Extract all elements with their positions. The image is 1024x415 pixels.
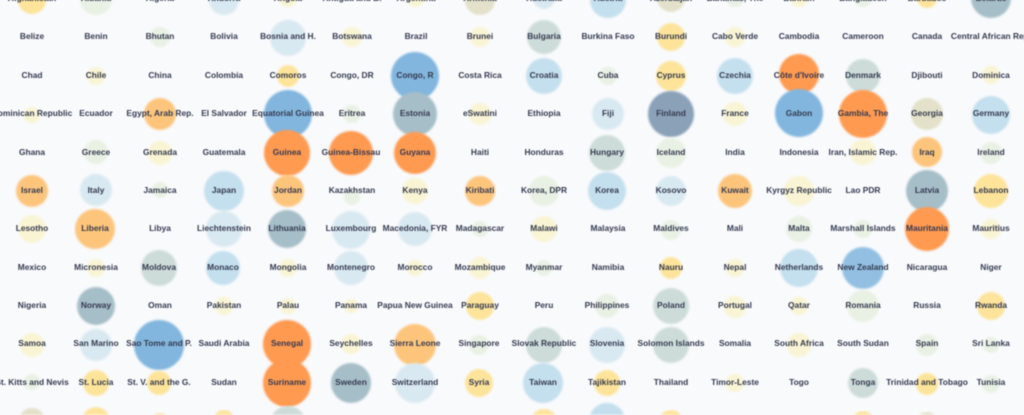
country: Kuwait: [718, 174, 752, 208]
country: Peru: Peru: [535, 300, 553, 310]
country: Jordan: Jordan: [274, 185, 302, 195]
country: Afghanistan: [8, 0, 56, 14]
country: Azerbaijan: [650, 0, 692, 12]
country: Czechia: [717, 58, 753, 94]
country: Thailand: Thailand: [654, 377, 688, 387]
country: Solomon Islands: [637, 327, 705, 363]
country: Chad: Chad: [22, 70, 42, 80]
row: Belize to Central African Rep.: [20, 20, 1024, 56]
country: Togo: Togo: [789, 377, 809, 387]
country: Croatia: Croatia: [530, 70, 559, 80]
country: Hungary: Hungary: [590, 147, 624, 157]
country: Kosovo: Kosovo: [656, 185, 686, 195]
country: Bosnia and H.: [260, 20, 316, 56]
country: Comoros: [270, 65, 307, 87]
country: Madagascar: [456, 221, 505, 237]
country: Cabo Verde: [712, 27, 758, 47]
country: eSwatini: [463, 103, 497, 125]
country: Netherlands: [775, 249, 824, 287]
row: bubbles cut off at the bottom edge: [20, 403, 934, 415]
country: Morocco: Morocco: [398, 262, 432, 272]
country: Palau: [277, 298, 299, 314]
country: Nepal: [724, 259, 746, 277]
country: Mali: Mali: [727, 223, 743, 233]
country: Liechtenstein: [197, 211, 251, 247]
country: China: China: [148, 70, 172, 80]
country: Sweden: Sweden: [335, 377, 367, 387]
country: Guinea: Guinea: [273, 147, 302, 157]
country: Sao Tome and P.: [126, 320, 192, 370]
country: Jordan: [272, 175, 304, 207]
country: Norway: Norway: [81, 300, 111, 310]
country: Timor-Leste: [711, 374, 759, 392]
country: Maldives: [653, 220, 689, 240]
country: San Marino: San Marino: [73, 338, 119, 348]
country: Belarus: [971, 0, 1011, 18]
country: Czechia: Czechia: [719, 70, 751, 80]
country: Georgia: Georgia: [911, 108, 943, 118]
country: Jamaica: Jamaica: [143, 185, 177, 195]
country: Sudan: Sudan: [211, 377, 237, 387]
country: Liechtenstein: Liechtenstein: [197, 223, 251, 233]
country: Romania: [845, 290, 881, 322]
country: Iceland: Iceland: [657, 147, 685, 157]
country: Israel: [16, 175, 48, 207]
country: Djibouti: Djibouti: [911, 70, 943, 80]
country: Liberia: [75, 209, 115, 249]
country: Singapore: [459, 335, 500, 355]
country: Oman: Oman: [148, 300, 172, 310]
country: Gabon: Gabon: [786, 108, 812, 118]
country: Morocco: [398, 260, 432, 276]
country: Chile: Chile: [86, 70, 107, 80]
country: Sao Tome and P.: Sao Tome and P.: [126, 338, 192, 348]
country: Bosnia and H.: Bosnia and H.: [260, 31, 316, 41]
country: Paraguay: [461, 292, 499, 320]
country: Iran, Islamic Rep.: Iran, Islamic Rep.: [829, 147, 897, 157]
country: Lebanon: [974, 174, 1008, 208]
row: Dominican Republic to Germany: [0, 89, 1010, 138]
country: Macedonia, FYR: [383, 212, 447, 246]
country: Pakistan: Pakistan: [207, 300, 241, 310]
country: Japan: [204, 171, 244, 211]
country: Cuba: [598, 67, 619, 85]
country: Spain: Spain: [916, 338, 938, 348]
country: Seychelles: [329, 334, 373, 354]
country: Iraq: [912, 137, 942, 167]
country: Estonia: Estonia: [400, 108, 430, 118]
country: Marshall Islands: Marshall Islands: [830, 223, 896, 233]
country: Gabon: [775, 89, 823, 137]
country: St. V. and the G.: [127, 371, 191, 395]
country: Malawi: [530, 216, 558, 242]
country: Cuba: Cuba: [598, 70, 619, 80]
country: Mauritania: Mauritania: [906, 223, 948, 233]
country: Latvia: [906, 170, 948, 212]
country: Tonga: Tonga: [851, 377, 876, 387]
country: Philippines: Philippines: [585, 300, 630, 310]
country: Benin: Benin: [84, 31, 108, 41]
country: Guinea-Bissau: Guinea-Bissau: [322, 147, 380, 157]
country: Ghana: Ghana: [19, 147, 45, 157]
country: Macedonia, FYR: Macedonia, FYR: [383, 223, 447, 233]
country: Brunei: Brunei: [467, 31, 493, 41]
country: Côte d'Ivoire: Côte d'Ivoire: [774, 70, 825, 80]
country: Guatemala: Guatemala: [203, 147, 246, 157]
country: Syria: [465, 369, 493, 397]
country: Gambia, The: [838, 90, 888, 138]
country: Bulgaria: Bulgaria: [527, 31, 561, 41]
country: Congo, R: Congo, R: [396, 70, 434, 80]
country: Nepal: Nepal: [724, 262, 746, 272]
country: Slovak Republic: [512, 327, 577, 363]
country: Honduras: Honduras: [524, 147, 564, 157]
country: Haiti: Haiti: [471, 147, 489, 157]
row: Chad to Dominica: [22, 52, 1010, 100]
country: Mozambique: Mozambique: [455, 262, 506, 272]
country: Switzerland: [392, 363, 438, 403]
country: Bangladesh: [839, 0, 887, 7]
country: Kyrgyz Republic: [766, 176, 832, 206]
country: Bahamas, The: [707, 0, 764, 7]
country: Pakistan: [207, 297, 241, 315]
country: Poland: [653, 288, 689, 324]
country: Tonga: [848, 368, 878, 398]
country: St. Lucia: St. Lucia: [79, 377, 114, 387]
country: Syria: Syria: [469, 377, 490, 387]
country: Luxembourg: [326, 211, 376, 249]
country: Congo, DR: Congo, DR: [330, 70, 374, 80]
country: Moldova: Moldova: [142, 262, 176, 272]
country: Samoa: [18, 333, 46, 357]
country: Monaco: Monaco: [207, 262, 239, 272]
country: Rwanda: Rwanda: [975, 300, 1007, 310]
country: Kyrgyz Republic: Kyrgyz Republic: [766, 185, 832, 195]
country: Kiribati: [465, 176, 495, 206]
row: Mexico to Niger: [18, 247, 1002, 289]
country: Poland: Poland: [657, 300, 685, 310]
country: Bhutan: [146, 27, 174, 47]
country: Lithuania: Lithuania: [268, 223, 306, 233]
country: San Marino: [73, 329, 119, 361]
country: Botswana: [332, 27, 372, 47]
country: Mongolia: [270, 259, 307, 277]
country: Montenegro: Montenegro: [327, 262, 375, 272]
country: Iraq: Iraq: [919, 147, 935, 157]
country: Palau: Palau: [277, 300, 299, 310]
country: Fiji: Fiji: [602, 108, 614, 118]
country: Ethiopia: Ethiopia: [527, 108, 561, 118]
country: Fiji: [592, 98, 624, 130]
country: Botswana: Botswana: [332, 31, 372, 41]
row: Ghana to Ireland: [19, 130, 1005, 176]
country: Sierra Leone: Sierra Leone: [390, 338, 441, 348]
country: Portugal: [718, 296, 752, 318]
country: Maldives: Maldives: [653, 223, 689, 233]
country: Micronesia: Micronesia: [74, 262, 118, 272]
country: Malta: Malta: [788, 223, 810, 233]
country: Cyprus: [656, 61, 686, 91]
country: Madagascar: Madagascar: [456, 223, 505, 233]
country: Tajikistan: Tajikistan: [588, 377, 626, 387]
country: Guinea-Bissau: [322, 131, 380, 175]
country: Cameroon: Cameroon: [842, 31, 884, 41]
country: India: India: [725, 147, 745, 157]
country: South Sudan: South Sudan: [837, 338, 889, 348]
country: Dominican Republic: [0, 107, 73, 123]
country: Burundi: Burundi: [655, 31, 687, 41]
country: Eritrea: [339, 105, 366, 123]
country: Libya: Libya: [149, 223, 171, 233]
country: Lebanon: Lebanon: [974, 185, 1008, 195]
country: Moldova: [141, 250, 177, 286]
country: Nicaragua: Nicaragua: [907, 262, 948, 272]
country: Sri Lanka: [972, 337, 1010, 353]
country: Nigeria: Nigeria: [18, 300, 47, 310]
country: Tunisia: Tunisia: [977, 377, 1006, 387]
country: Japan: Japan: [212, 185, 236, 195]
country: Angola: [274, 0, 303, 7]
country: Iran, Islamic Rep.: [829, 139, 897, 165]
country: Brunei: [467, 27, 493, 47]
country: Armenia: [463, 0, 497, 15]
country: Paraguay: Paraguay: [461, 300, 499, 310]
country: Tunisia: [977, 375, 1006, 393]
country: Hungary: [589, 135, 625, 171]
country: Dominica: [972, 66, 1010, 84]
country: Kuwait: Kuwait: [721, 185, 749, 195]
country: France: [721, 102, 749, 126]
country: Korea, DPR: Korea, DPR: [521, 185, 567, 195]
country: Equatorial Guinea: [252, 90, 324, 138]
country: Indonesia: Indonesia: [779, 147, 819, 157]
country: Portugal: Portugal: [718, 300, 752, 310]
country: Denmark: Denmark: [845, 70, 881, 80]
country: Singapore: Singapore: [459, 338, 500, 348]
country: Suriname: Suriname: [268, 377, 306, 387]
row: Samoa to Sri Lanka: [18, 320, 1010, 370]
country: Kenya: [402, 178, 428, 204]
country: Switzerland: Switzerland: [392, 377, 438, 387]
country: Finland: [648, 91, 694, 137]
country: Jamaica: [143, 182, 177, 198]
country: Korea: Korea: [595, 185, 619, 195]
country: Mauritania: [905, 207, 949, 251]
country: Gambia, The: Gambia, The: [838, 108, 888, 118]
country: Greece: Greece: [82, 147, 111, 157]
country: St. Kitts and Nevis: [0, 374, 69, 390]
country: Lao PDR: Lao PDR: [846, 185, 880, 195]
country: Rwanda: [975, 292, 1007, 320]
country: Croatia: [526, 58, 562, 94]
country: Germany: Germany: [973, 108, 1009, 118]
country: Argentina: [396, 0, 436, 7]
country: Kazakhstan: Kazakhstan: [329, 185, 375, 195]
country: Montenegro: [327, 251, 375, 285]
country: Tajikistan: [588, 370, 626, 396]
country: Mongolia: Mongolia: [270, 262, 307, 272]
country: Marshall Islands: [830, 220, 896, 238]
country: Trinidad and Tobago: Trinidad and Tobago: [886, 377, 968, 387]
country: Italy: Italy: [88, 185, 105, 195]
country: Romania: Romania: [845, 300, 881, 310]
country: Israel: Israel: [21, 185, 43, 195]
country: Guyana: [394, 132, 436, 174]
country: El Salvador: El Salvador: [201, 108, 248, 118]
country: Myanmar: [526, 260, 563, 276]
country: Burkina Faso: Burkina Faso: [581, 31, 635, 41]
country: Papua New Guinea: Papua New Guinea: [377, 300, 453, 310]
country: Lesotho: Lesotho: [16, 223, 48, 233]
country: Equatorial Guinea: Equatorial Guinea: [252, 108, 324, 118]
country: Mozambique: [455, 257, 506, 279]
country: Netherlands: Netherlands: [775, 262, 824, 272]
country: Suriname: [263, 359, 311, 407]
country: Taiwan: [523, 363, 563, 403]
country: Germany: [972, 96, 1010, 134]
country: Cyprus: Cyprus: [657, 70, 686, 80]
country: Solomon Islands: Solomon Islands: [637, 338, 705, 348]
country: Samoa: Samoa: [18, 338, 46, 348]
country: Latvia: Latvia: [915, 185, 939, 195]
country: Timor-Leste: Timor-Leste: [711, 377, 759, 387]
country: Estonia: [393, 92, 437, 136]
country: Slovak Republic: Slovak Republic: [512, 338, 577, 348]
country: Somalia: Somalia: [719, 338, 751, 348]
country: Senegal: [263, 320, 311, 368]
row: Lesotho to Mauritius: [16, 207, 1010, 251]
country: Micronesia: [74, 259, 118, 277]
country: Belize: Belize: [20, 31, 44, 41]
country: Mexico: Mexico: [18, 262, 46, 272]
country: Saudi Arabia: Saudi Arabia: [199, 338, 250, 348]
country: France: France: [721, 108, 749, 118]
country: South Africa: South Africa: [774, 338, 824, 348]
country: Kosovo: [656, 176, 686, 206]
country: Comoros: Comoros: [270, 70, 307, 80]
country: Liberia: Liberia: [81, 223, 109, 233]
country: Bahrain: [783, 0, 815, 7]
country: Denmark: [845, 59, 881, 93]
country: Albania: [80, 0, 112, 15]
country: Ireland: Ireland: [977, 147, 1005, 157]
country: Austria: [590, 0, 626, 18]
country: Sri Lanka: Sri Lanka: [972, 338, 1010, 348]
country: Malawi: Malawi: [530, 223, 558, 233]
country: Italy: [80, 174, 112, 206]
country: Slovenia: [589, 327, 625, 363]
country: Eritrea: Eritrea: [339, 108, 366, 118]
country: Norway: [77, 287, 115, 325]
country: Ireland: [977, 142, 1005, 164]
country: Mauritius: [972, 219, 1010, 239]
country: Bolivia: Bolivia: [210, 31, 238, 41]
country: Qatar: Qatar: [788, 300, 811, 310]
country: Trinidad and Tobago: [886, 373, 968, 395]
country: Monaco: [206, 251, 240, 285]
country: Egypt, Arab Rep.: [126, 98, 194, 130]
country: Philippines: [585, 294, 630, 318]
country: Slovenia: Slovenia: [590, 338, 625, 348]
country: Guyana: Guyana: [400, 147, 431, 157]
country: Iceland: [656, 138, 686, 168]
country: eSwatini: eSwatini: [463, 108, 497, 118]
country: Myanmar: Myanmar: [526, 262, 563, 272]
country: Egypt, Arab Rep.: Egypt, Arab Rep.: [126, 108, 194, 118]
country: Georgia: [911, 98, 943, 130]
country: Nauru: Nauru: [659, 262, 683, 272]
country: New Zealand: [837, 247, 889, 289]
country: Senegal: Senegal: [271, 338, 303, 348]
country: South Africa: [774, 333, 824, 357]
country: Spain: [916, 334, 938, 356]
row: St. Kitts and Nevis to Tunisia: [0, 359, 1006, 407]
country: Finland: Finland: [656, 108, 686, 118]
country: St. V. and the G.: St. V. and the G.: [127, 377, 191, 387]
country: Sierra Leone: [390, 324, 441, 366]
country: Namibia: Namibia: [592, 262, 625, 272]
country: Kazakhstan: [329, 185, 375, 205]
country: Australia: [526, 0, 562, 9]
country: Grenada: Grenada: [143, 147, 177, 157]
row: Afghanistan to Belarus: [8, 0, 1011, 18]
row: Nigeria to Rwanda: [18, 287, 1007, 325]
country: Lithuania: [268, 210, 306, 248]
country: Qatar: [788, 297, 811, 315]
country: Bhutan: Bhutan: [146, 31, 174, 41]
country: Nauru: [659, 257, 683, 279]
country: Chile: [86, 67, 107, 85]
country: Taiwan: Taiwan: [529, 377, 557, 387]
country: Cambodia: Cambodia: [779, 31, 820, 41]
country: Canada: Canada: [912, 31, 942, 41]
country: Seychelles: Seychelles: [329, 338, 373, 348]
country: Kenya: Kenya: [402, 185, 428, 195]
country: Costa Rica: Costa Rica: [458, 70, 502, 80]
country: New Zealand: New Zealand: [837, 262, 889, 272]
country: Malta: [786, 216, 812, 242]
country: Cabo Verde: Cabo Verde: [712, 31, 758, 41]
country: Ecuador: Ecuador: [79, 108, 113, 118]
country: Guinea: [264, 130, 310, 176]
country: Grenada: [143, 141, 177, 165]
country: Malaysia: Malaysia: [591, 223, 626, 233]
country: Barbados: [908, 0, 947, 8]
country: Russia: Russia: [913, 300, 941, 310]
country: Bulgaria: [527, 20, 561, 54]
country: Kiribati: Kiribati: [466, 185, 494, 195]
country: Luxembourg: Luxembourg: [326, 223, 376, 233]
country: Andorra: [208, 0, 241, 15]
country: Niger: Niger: [980, 262, 1002, 272]
row: Israel to Lebanon: [16, 170, 1008, 212]
country: Congo, R: [391, 52, 439, 100]
country: Panama: Panama: [335, 300, 367, 310]
country: Côte d'Ivoire: [774, 54, 825, 94]
country: Sweden: [331, 363, 371, 403]
country: Brazil: Brazil: [405, 31, 427, 41]
country: Burundi: [655, 23, 687, 51]
country: Dominica: Dominica: [972, 70, 1010, 80]
country: Korea, DPR: [521, 176, 567, 206]
country: Lesotho: [16, 215, 48, 243]
country: Greece: [82, 140, 111, 164]
country: St. Lucia: [79, 370, 114, 396]
country: Mauritius: Mauritius: [972, 223, 1010, 233]
country: Korea: [588, 172, 626, 210]
country: Colombia: Colombia: [205, 70, 243, 80]
